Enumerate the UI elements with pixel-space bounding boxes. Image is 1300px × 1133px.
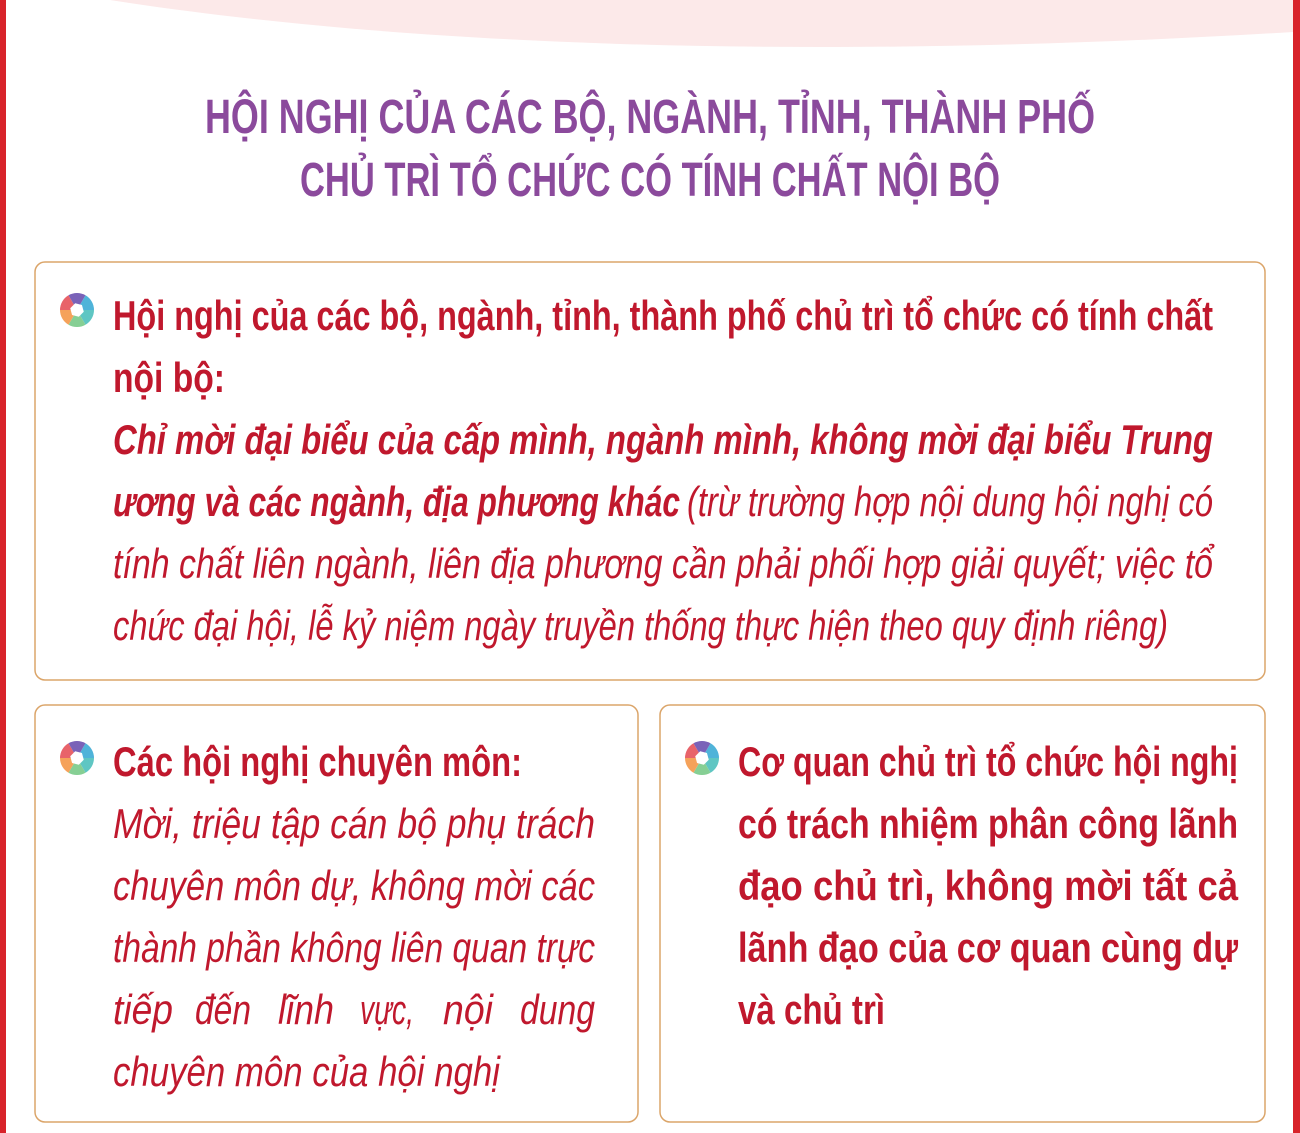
text block: internal conferences: nội bộ: [113, 354, 225, 401]
text block: professional conferences: lĩnh [278, 986, 334, 1033]
text block: internal conferences: ương và các ngành, địa phương khác [113, 478, 680, 525]
text block: professional conferences: Mời, triệu tập cán bộ phụ trách [113, 800, 595, 847]
text block: professional conferences: chuyên môn dự, không mời các [113, 862, 595, 909]
text block: internal conferences [113, 292, 1215, 649]
icon: aperture [60, 741, 94, 775]
text block: professional conferences: vực, [360, 986, 414, 1033]
text block: professional conferences: thành phần không liên quan trực [113, 924, 595, 971]
panel: host agency [660, 705, 1265, 1122]
panel: internal conferences [35, 262, 1265, 680]
text block: professional conferences: Các hội nghị chuyên môn: [113, 738, 522, 785]
icon: aperture [60, 293, 94, 327]
panel: professional conferences [35, 705, 638, 1122]
title [205, 89, 1095, 207]
text block: professional conferences: nội [443, 986, 494, 1033]
text block: host agency: đạo chủ trì, không mời tất cả [738, 862, 1239, 909]
icon: aperture [685, 741, 719, 775]
text block: professional conferences: dung [520, 986, 595, 1033]
text block: host agency: và chủ trì [738, 986, 885, 1033]
top pink curve [110, 0, 1293, 47]
text block: professional conferences: tiếp [113, 986, 173, 1033]
text block: professional conferences: chuyên môn của hội nghị [113, 1048, 501, 1095]
text block: professional conferences: đến [195, 986, 251, 1033]
text block: professional conferences [113, 738, 595, 1095]
text block: host agency [738, 738, 1239, 1033]
title: CHỦ TRÌ TỔ CHỨC CÓ TÍNH CHẤT NỘI BỘ [300, 152, 1000, 207]
